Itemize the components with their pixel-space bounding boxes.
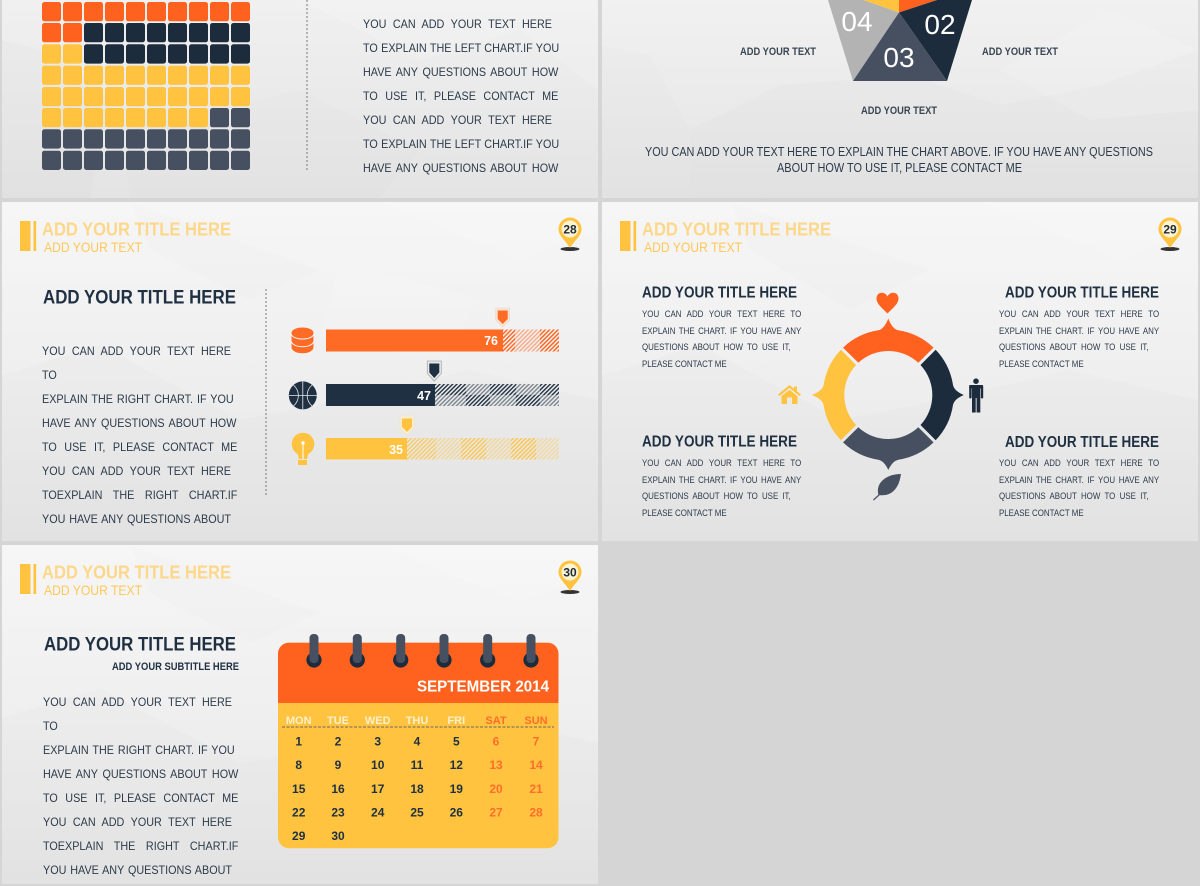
icon: leaf <box>874 474 901 500</box>
icon: light bulb <box>292 433 314 465</box>
text block: bottom left: PLEASE CONTACT ME <box>642 508 727 518</box>
pyramid chart <box>828 0 972 81</box>
text block: left chart explanation: HAVE ANY QUESTIONS ABOUT HOW <box>363 65 558 79</box>
page pin: 30 <box>558 560 582 594</box>
weekday row: SAT <box>485 715 507 727</box>
heading: bottom right: ADD YOUR TITLE HERE <box>1005 434 1159 451</box>
text block: top left: PLEASE CONTACT ME <box>642 359 727 369</box>
icon: person <box>969 378 983 412</box>
text block: bottom right: YOU CAN ADD YOUR TEXT HERE TO <box>999 458 1159 468</box>
text block: calendar explanation <box>43 695 238 877</box>
subtitle: ADD YOUR SUBTITLE HERE <box>112 661 239 673</box>
text block: left chart explanation: YOU CAN ADD YOUR TEXT HERE <box>363 17 552 31</box>
caption: ABOUT HOW TO USE IT, PLEASE CONTACT ME <box>777 161 1022 175</box>
bar: 35: 35 <box>389 443 403 457</box>
text block: top left: YOU CAN ADD YOUR TEXT HERE TO <box>642 309 801 319</box>
dates: 12 <box>450 758 463 772</box>
text block: right chart explanation: EXPLAIN THE RIGHT CHART. IF YOU <box>42 392 234 406</box>
text block: right chart explanation: HAVE ANY QUESTIONS ABOUT HOW <box>42 416 236 430</box>
text block: calendar explanation: TOEXPLAIN THE RIGHT CHART.IF <box>43 839 238 853</box>
dates: 7 <box>533 734 540 748</box>
dates: 1 <box>295 734 302 748</box>
weekday row: TUE <box>327 715 349 727</box>
bar: 76: 76 <box>484 334 498 348</box>
text block: top left: QUESTIONS ABOUT HOW TO USE IT, <box>642 342 791 352</box>
weekday row: MON <box>286 715 312 727</box>
bar: 76 <box>326 308 559 352</box>
text block: calendar explanation: YOU CAN ADD YOUR TEXT HERE <box>43 815 232 829</box>
dates: 21 <box>529 782 543 796</box>
text block: bottom right <box>999 458 1159 518</box>
panel: waffle chart slide <box>2 0 598 198</box>
waffle chart <box>42 2 250 170</box>
dates: 19 <box>450 782 463 796</box>
text block: bottom left: YOU CAN ADD YOUR TEXT HERE TO <box>642 458 801 468</box>
dates: 22 <box>292 806 306 820</box>
text block: calendar explanation: YOU HAVE ANY QUESTIONS ABOUT <box>43 863 232 877</box>
bar: 47 <box>326 361 559 406</box>
calendar <box>278 634 558 848</box>
dates: 4 <box>414 734 421 748</box>
header: title and subtitle <box>20 218 231 255</box>
binder rings <box>306 634 539 668</box>
dates: 5 <box>453 734 460 748</box>
text block: calendar explanation: EXPLAIN THE RIGHT CHART. IF YOU <box>43 743 235 757</box>
text block: calendar explanation: YOU CAN ADD YOUR TEXT HERE <box>43 695 232 709</box>
icon: heart <box>876 293 898 314</box>
dates: 30 <box>331 829 345 843</box>
page pin: 29: 29 <box>1163 222 1177 236</box>
text block: left chart explanation: HAVE ANY QUESTIONS ABOUT HOW <box>363 161 558 175</box>
text block: right chart explanation: TOEXPLAIN THE RIGHT CHART.IF <box>42 488 237 502</box>
panel: calendar slide <box>2 545 598 884</box>
month label: SEPTEMBER 2014 <box>417 678 549 696</box>
dates: 26 <box>450 806 463 820</box>
text block: bottom left: QUESTIONS ABOUT HOW TO USE IT, <box>642 491 791 501</box>
heading: ADD YOUR TITLE HERE <box>44 634 236 656</box>
bar: 47: 47 <box>417 389 431 403</box>
dates: 8 <box>295 758 302 772</box>
weekday row <box>286 715 548 727</box>
page pin: 30: 30 <box>563 566 577 580</box>
dates: 2 <box>335 734 342 748</box>
icon: basketball <box>289 381 317 409</box>
weekday row: SUN <box>524 715 548 727</box>
header: title and subtitle: ADD YOUR TITLE HERE <box>42 562 231 582</box>
icon: database <box>291 327 314 354</box>
text block: bottom right: PLEASE CONTACT ME <box>999 508 1084 518</box>
dates: 17 <box>371 782 385 796</box>
header: title and subtitle <box>620 218 831 255</box>
pyramid chart: 02 <box>924 9 956 40</box>
dates: 13 <box>489 758 503 772</box>
dates: 20 <box>489 782 503 796</box>
text block: calendar explanation: TO <box>43 719 58 733</box>
heading: top left: ADD YOUR TITLE HERE <box>642 284 797 302</box>
text block: left chart explanation: TO USE IT, PLEASE CONTACT ME <box>363 89 558 103</box>
text block: top left <box>642 309 801 369</box>
dates: 11 <box>411 758 424 772</box>
dates: 3 <box>374 734 381 748</box>
dates: 15 <box>292 782 306 796</box>
page pin: 28 <box>558 218 582 251</box>
icon: house <box>778 385 801 404</box>
text block: right chart explanation: TO <box>42 368 57 382</box>
heading: bottom left: ADD YOUR TITLE HERE <box>642 434 797 450</box>
dates: 25 <box>410 806 424 820</box>
dates: 10 <box>371 758 385 772</box>
label: left: ADD YOUR TEXT <box>740 46 816 58</box>
text block: left chart explanation: TO EXPLAIN THE LEFT CHART.IF YOU <box>363 137 559 151</box>
label: right: ADD YOUR TEXT <box>982 46 1058 58</box>
text block: right chart explanation: YOU CAN ADD YOUR TEXT HERE <box>42 344 231 358</box>
text block: bottom left: EXPLAIN THE CHART. IF YOU HAVE ANY <box>642 475 801 485</box>
header: title and subtitle: ADD YOUR TEXT <box>644 239 742 255</box>
text block: top right <box>999 309 1159 369</box>
page pin: 29 <box>1158 218 1182 251</box>
panel: ring diagram slide <box>602 202 1198 541</box>
dates: 16 <box>331 782 345 796</box>
text block: calendar explanation: HAVE ANY QUESTIONS ABOUT HOW <box>43 767 238 781</box>
weekday row: THU <box>406 715 428 727</box>
header: title and subtitle: ADD YOUR TITLE HERE <box>42 218 231 240</box>
dates: 6 <box>493 734 500 748</box>
caption <box>645 145 1153 175</box>
text block: bottom right: EXPLAIN THE CHART. IF YOU HAVE ANY <box>999 475 1159 485</box>
text block: left chart explanation: YOU CAN ADD YOUR TEXT HERE <box>363 113 552 127</box>
text block: bottom left <box>642 458 801 518</box>
panel: progress bars slide <box>2 202 598 541</box>
text block: top left: EXPLAIN THE CHART. IF YOU HAVE ANY <box>642 326 801 336</box>
dates: 27 <box>489 806 503 820</box>
pyramid chart: 04 <box>841 6 873 37</box>
label: bottom: ADD YOUR TEXT <box>861 105 937 117</box>
text block: top right: QUESTIONS ABOUT HOW TO USE IT, <box>999 342 1149 352</box>
header: title and subtitle: ADD YOUR TEXT <box>44 582 142 598</box>
heading: ADD YOUR TITLE HERE <box>43 286 236 308</box>
text block: left chart explanation <box>363 17 559 175</box>
weekday row: FRI <box>447 715 465 727</box>
text block: right chart explanation: YOU HAVE ANY QUESTIONS ABOUT <box>42 512 231 526</box>
bar: 35 <box>326 416 559 460</box>
weekday row: WED <box>365 715 391 727</box>
heading: top right: ADD YOUR TITLE HERE <box>1005 284 1159 302</box>
dates <box>292 734 543 843</box>
dates: 24 <box>371 806 385 820</box>
text block: bottom right: QUESTIONS ABOUT HOW TO USE IT, <box>999 491 1149 501</box>
text block: calendar explanation: TO USE IT, PLEASE CONTACT ME <box>43 791 238 805</box>
text block: right chart explanation: YOU CAN ADD YOUR TEXT HERE <box>42 464 231 478</box>
dates: 28 <box>529 806 543 820</box>
text block: right chart explanation <box>42 344 237 526</box>
text block: top right: EXPLAIN THE CHART. IF YOU HAVE ANY <box>999 326 1159 336</box>
text block: top right: PLEASE CONTACT ME <box>999 359 1084 369</box>
dates: 9 <box>335 758 342 772</box>
text block: right chart explanation: TO USE IT, PLEASE CONTACT ME <box>42 440 237 454</box>
dates: 18 <box>410 782 424 796</box>
page pin: 28: 28 <box>563 222 577 236</box>
header: title and subtitle <box>20 562 231 598</box>
panel: pyramid chart slide <box>602 0 1198 198</box>
dates: 23 <box>331 806 345 820</box>
header: title and subtitle: ADD YOUR TEXT <box>44 239 142 255</box>
text block: left chart explanation: TO EXPLAIN THE LEFT CHART.IF YOU <box>363 41 559 55</box>
pyramid chart: 03 <box>883 42 915 73</box>
ring diagram <box>812 318 964 470</box>
text block: top right: YOU CAN ADD YOUR TEXT HERE TO <box>999 309 1159 319</box>
dates: 29 <box>292 829 306 843</box>
dates: 14 <box>529 758 543 772</box>
header: title and subtitle: ADD YOUR TITLE HERE <box>642 218 831 240</box>
